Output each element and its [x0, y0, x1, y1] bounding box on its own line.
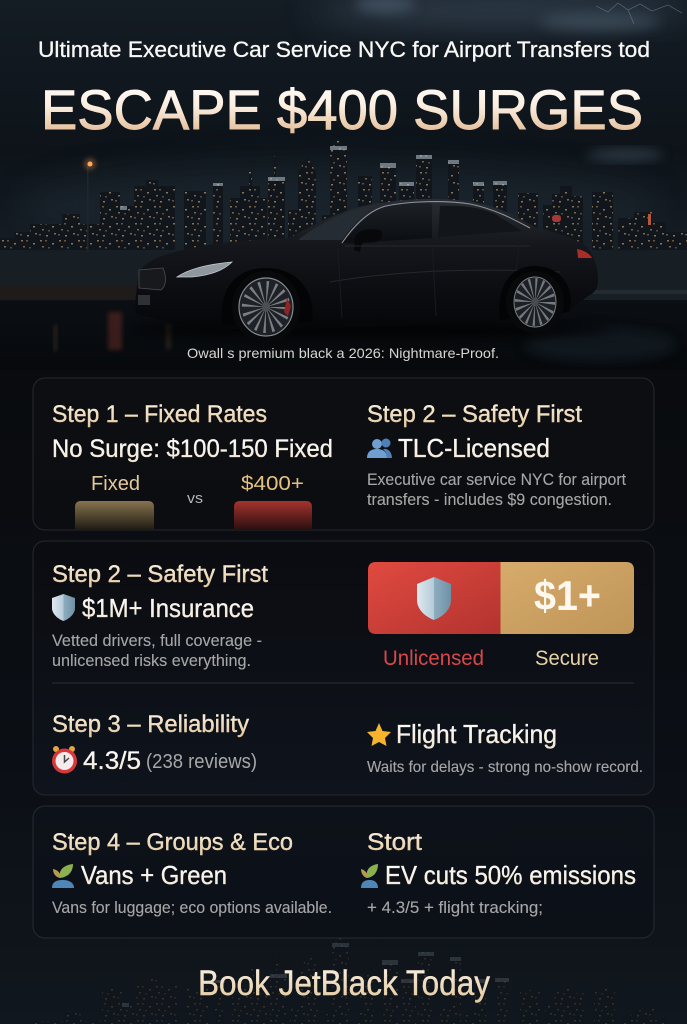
panel: step 1 fixed rates and TLC licensed: [33, 378, 654, 530]
front wheel: [232, 271, 300, 343]
heading: step 2 safety: Step 2 – Safety First: [52, 561, 268, 588]
icon: leaf vans: [52, 864, 74, 888]
main headline: ESCAPE $400 SURGES: [41, 78, 643, 141]
icon: leaf EV: [361, 864, 378, 888]
text: no surge price: No Surge: $100-150 Fixed: [52, 435, 333, 463]
heading: start: Stort: [367, 829, 422, 856]
icon: people: [367, 438, 392, 458]
heading: step 3: Step 3 – Reliability: [52, 711, 250, 738]
comparison bar: unlicensed vs secure: [368, 562, 634, 634]
label: vs: vs: [187, 490, 203, 507]
panel: groups and eco: [33, 806, 654, 938]
call to action: Book JetBlack Today: [198, 964, 490, 1003]
hero caption: Owall s premium black a 2026: Nightmare-Proof.: [187, 345, 499, 361]
text: executive car service: Executive car service NYC for airport: [367, 471, 626, 489]
text: TLC licensed: TLC-Licensed: [398, 433, 550, 463]
heading: step 4: Step 4 – Groups & Eco: [52, 829, 293, 856]
city skyline: [0, 138, 687, 254]
text: executive car service: transfers - includes $9 congestion.: [367, 491, 612, 509]
lower page background: [0, 370, 687, 1024]
text: executive car service: [367, 471, 626, 509]
text: EV emissions: EV cuts 50% emissions: [385, 860, 636, 890]
text: reviews count: (238 reviews): [146, 751, 257, 773]
label: unlicensed: Unlicensed: [383, 647, 484, 670]
title: Ultimate Executive Car Service NYC for Airport Transfers tod: [38, 37, 650, 62]
icon: small shield: [52, 594, 75, 621]
icon: star: [367, 723, 391, 746]
text: rating: 4.3/5: [83, 747, 141, 775]
waterfront wall and wet road: [0, 252, 687, 380]
text: flight tracking: Flight Tracking: [396, 719, 557, 749]
value: $1+: $1+: [534, 572, 601, 619]
text: vetted drivers: Vetted drivers, full coverage -: [52, 632, 262, 650]
panel: safety and reliability: [33, 541, 654, 795]
heading: step 1: Step 1 – Fixed Rates: [52, 401, 267, 428]
label: fixed: Fixed: [91, 473, 140, 495]
label: secure: Secure: [535, 647, 599, 670]
icon: alarm clock: [52, 746, 77, 774]
rear wheel: [506, 271, 564, 333]
black sedan car: [130, 199, 610, 343]
bottom faint skyline: [2, 935, 687, 1024]
text: insurance: $1M+ Insurance: [82, 593, 254, 623]
text: vetted drivers: unlicensed risks everything.: [52, 652, 251, 670]
text: waits for delays: Waits for delays - strong no-show record.: [367, 759, 643, 776]
heading: step 2 top: Step 2 – Safety First: [367, 401, 582, 428]
text: rating and tracking: + 4.3/5 + flight tracking;: [367, 899, 543, 917]
hero background: stormy sky: [0, 0, 687, 380]
label: $400+: $400+: [241, 473, 304, 495]
bar: fixed rate: [75, 501, 154, 530]
bar: surge rate: [234, 501, 312, 530]
text: vans and green: Vans + Green: [81, 860, 227, 890]
text: vetted drivers: [52, 632, 262, 670]
icon: large shield: [417, 577, 451, 620]
text: vans for luggage: Vans for luggage; eco options available.: [52, 899, 332, 917]
